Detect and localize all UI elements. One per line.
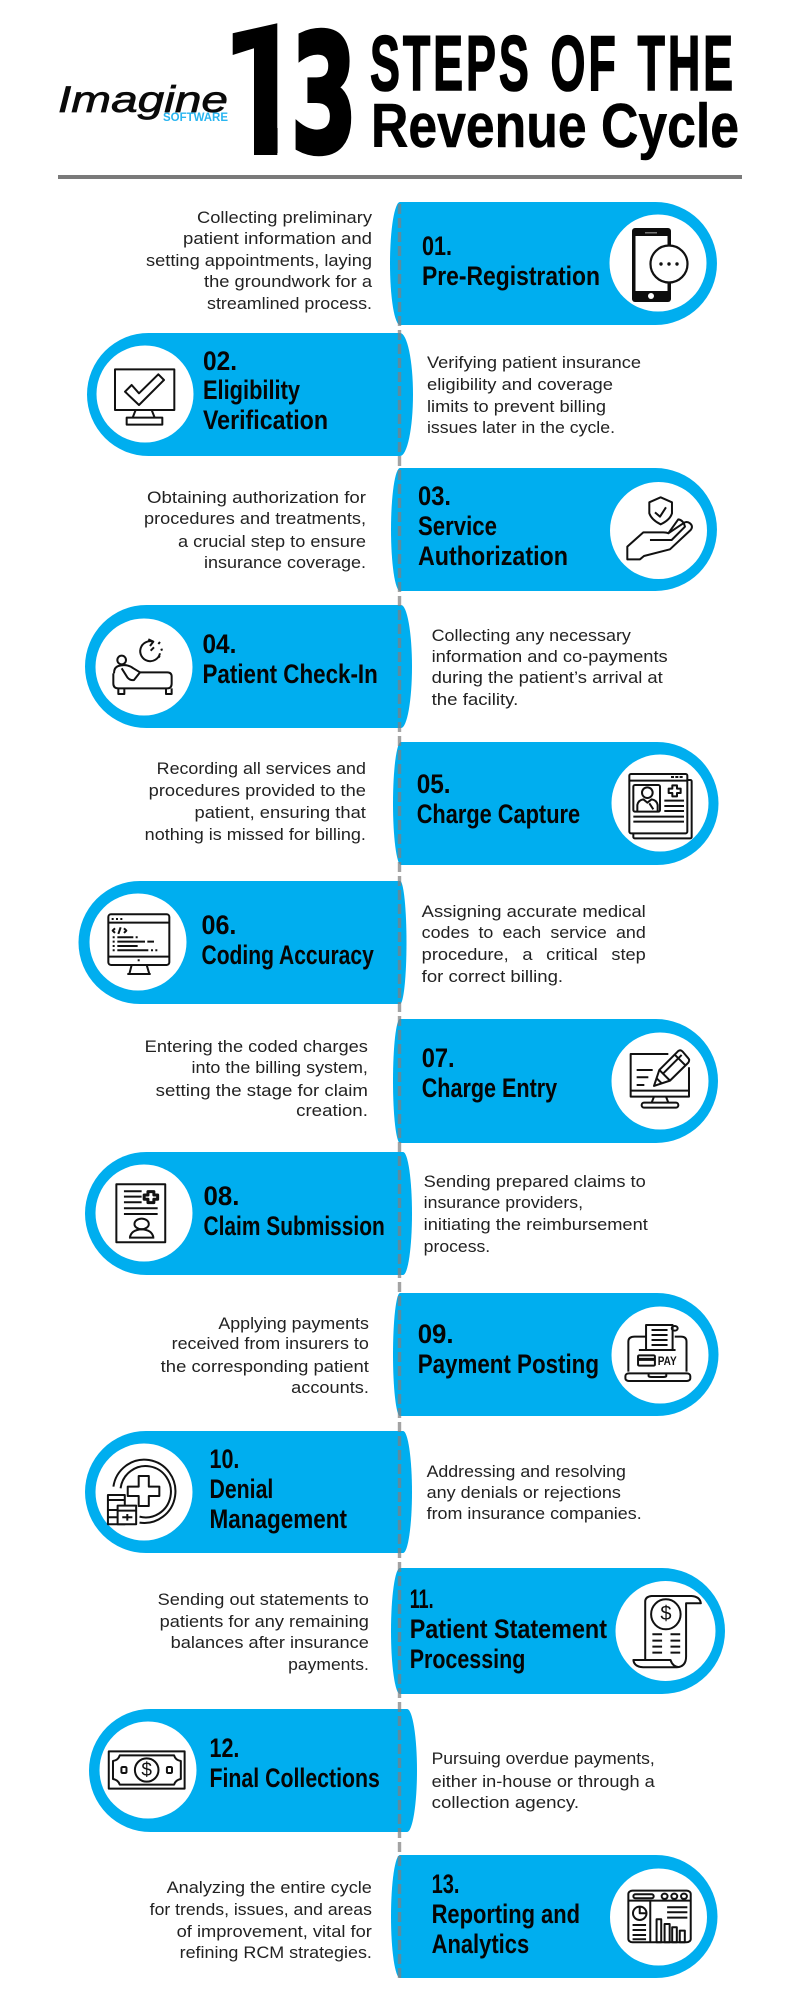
text block: step 06 description: Assigning accurate medical [422, 902, 646, 921]
panel: step 05 charge capture: 05. [417, 769, 451, 799]
text block: step 04 description: during the patient’s arrival at [432, 668, 663, 687]
text block: step 01 description [146, 208, 373, 313]
panel: step 03 service authorization [391, 468, 717, 591]
icon: receipt scroll with dollar: $ [660, 1603, 671, 1625]
text block: step 08 description [424, 1172, 648, 1256]
text block: step 07 description: creation. [296, 1101, 368, 1120]
panel: step 02 eligibility verification: 02. [203, 346, 237, 376]
panel: step 07 charge entry: Charge Entry [422, 1073, 557, 1103]
text block: step 01 description: the groundwork for a [204, 272, 373, 291]
panel: step 04 patient check-in [85, 605, 412, 728]
panel: step 10 denial management: 10. [210, 1444, 239, 1474]
text block: step 09 description: Applying payments [218, 1314, 369, 1333]
panel: step 03 service authorization: Authorization [418, 541, 568, 571]
text block: step 06 description: for correct billing. [422, 967, 563, 986]
text block: step 11 description: Sending out statements to [158, 1590, 369, 1609]
panel: step 09 payment posting: Payment Posting [418, 1349, 599, 1379]
text block: step 02 description: issues later in the cycle. [427, 418, 615, 437]
text block: step 11 description: patients for any remaining [160, 1612, 369, 1631]
panel: step 05 charge capture: Charge Capture [417, 799, 580, 829]
text block: step 08 description: initiating the reimbursement [424, 1215, 648, 1234]
panel: step 08 claim submission [85, 1152, 412, 1275]
panel: step 10 denial management: Management [210, 1504, 347, 1534]
text block: step 05 description: nothing is missed for billing. [145, 825, 366, 844]
text block: step 04 description [432, 626, 668, 709]
text block: step 09 description: received from insurers to [172, 1334, 369, 1353]
panel: step 11 patient statement processing: Patient Statement [410, 1614, 607, 1644]
panel: step 01 pre-registration: 01. [422, 231, 452, 261]
text block: step 12 description: Pursuing overdue payments, [432, 1749, 655, 1768]
panel: step 02 eligibility verification [87, 333, 413, 456]
text block: step 11 description [158, 1590, 369, 1674]
panel: step 04 patient check-in: 04. [202, 629, 236, 659]
panel: step 08 claim submission: 08. [204, 1181, 239, 1211]
panel: step 02 eligibility verification: Verification [203, 405, 328, 435]
panel: step 03 service authorization: Service [418, 511, 497, 541]
icon: dollar bill [109, 1751, 185, 1789]
text block: step 01 description: streamlined process. [207, 294, 372, 313]
logo: Imagine Software: Imagine [58, 79, 228, 120]
text block: step 10 description [427, 1462, 642, 1523]
text block: step 09 description: the corresponding patient [161, 1357, 369, 1376]
icon: patient on bed with clock [113, 639, 172, 694]
logo: Imagine Software: SOFTWARE [163, 112, 228, 124]
text block: step 05 description: Recording all services and [157, 759, 366, 778]
icon: dollar bill: $ [141, 1760, 152, 1781]
panel: step 13 reporting and analytics: Reporting and [432, 1899, 580, 1929]
text block: step 07 description [145, 1037, 368, 1120]
panel: step 02 eligibility verification: Eligibility [203, 375, 300, 405]
text block: step 10 description: any denials or rejections [427, 1483, 621, 1502]
text block: step 13 description [150, 1878, 372, 1962]
text block: step 13 description: of improvement, vital for [177, 1922, 372, 1941]
text block: step 13 description: refining RCM strategies. [180, 1943, 372, 1962]
text block: step 01 description: Collecting preliminary [197, 208, 373, 227]
panel: step 06 coding accuracy [78, 881, 406, 1004]
panel: step 11 patient statement processing: Processing [410, 1644, 525, 1674]
text block: step 02 description: Verifying patient insurance [427, 353, 641, 372]
panel: step 10 denial management [85, 1431, 412, 1553]
panel: step 07 charge entry [393, 1019, 718, 1143]
icon: laptop with pay receipt: PAY [658, 1354, 677, 1368]
title: steps of the revenue cycle [370, 19, 739, 161]
panel: step 09 payment posting: 09. [418, 1319, 454, 1349]
text block: step 06 description: procedure, a critical step [422, 945, 646, 964]
text block: step 03 description [144, 488, 366, 572]
timeline: dashed vertical connector [398, 204, 401, 1980]
text block: step 11 description: balances after insurance [171, 1633, 369, 1652]
panel: step 01 pre-registration: Pre-Registration [422, 261, 600, 291]
icon: claim form document [116, 1184, 165, 1242]
text block: step 02 description [427, 353, 641, 437]
icon: hand holding shield [627, 497, 692, 559]
text block: step 04 description: the facility. [432, 690, 518, 709]
panel: step 03 service authorization: 03. [418, 481, 451, 511]
panel: step 13 reporting and analytics [391, 1855, 717, 1978]
text block: step 08 description: process. [424, 1237, 490, 1256]
text block: step 05 description: patient, ensuring that [194, 803, 366, 822]
panel: step 06 coding accuracy: Coding Accuracy [202, 940, 374, 970]
text block: step 03 description: procedures and treatments, [144, 509, 366, 528]
text block: step 01 description: patient information and [183, 229, 372, 248]
panel: step 10 denial management: Denial [210, 1474, 273, 1504]
title: large numeral 13: 1 [250, 2, 280, 190]
text block: step 01 description: setting appointments, laying [146, 251, 372, 270]
panel: step 07 charge entry: 07. [422, 1043, 455, 1073]
text block: step 07 description: Entering the coded charges [145, 1037, 368, 1056]
text block: step 07 description: into the billing system, [192, 1058, 368, 1077]
icon: code on monitor [108, 914, 169, 974]
panel: step 13 reporting and analytics: Analytics [432, 1929, 529, 1959]
text block: step 11 description: payments. [288, 1655, 369, 1674]
panel: step 05 charge capture [393, 742, 718, 865]
header divider bar [58, 175, 742, 179]
text block: step 07 description: setting the stage for claim [156, 1081, 368, 1100]
icon: receipt scroll with dollar [633, 1596, 701, 1667]
text block: step 03 description: Obtaining authorization for [147, 488, 366, 507]
icon: monitor with pencil [631, 1050, 689, 1108]
text block: step 03 description: a crucial step to ensure [178, 532, 366, 551]
panel: step 11 patient statement processing: 11. [410, 1584, 434, 1614]
title: large numeral 13: 3 [291, 2, 357, 190]
text block: step 02 description: limits to prevent billing [427, 397, 606, 416]
panel: step 04 patient check-in: Patient Check-In [202, 659, 378, 689]
icon: laptop with pay receipt [625, 1325, 690, 1381]
text block: step 05 description [145, 759, 366, 844]
text block: step 10 description: from insurance companies. [427, 1504, 642, 1523]
text block: step 09 description: accounts. [291, 1378, 369, 1397]
panel: step 09 payment posting [393, 1293, 718, 1416]
title: steps of the revenue cycle: Revenue Cycle [371, 92, 739, 161]
text block: step 10 description: Addressing and resolving [427, 1462, 626, 1481]
text block: step 08 description: insurance providers, [424, 1193, 583, 1212]
icon: medical cross with boxes [108, 1460, 175, 1524]
text block: step 04 description: information and co-payments [432, 647, 668, 666]
text block: step 13 description: Analyzing the entire cycle [167, 1878, 372, 1897]
text block: step 05 description: procedures provided to the [149, 781, 366, 800]
text block: step 04 description: Collecting any necessary [432, 626, 631, 645]
icon: monitor with check mark [115, 369, 174, 425]
text block: step 06 description: codes to each service and [422, 923, 646, 942]
text block: step 02 description: eligibility and coverage [427, 375, 613, 394]
panel: step 13 reporting and analytics: 13. [432, 1869, 460, 1899]
text block: step 03 description: insurance coverage. [204, 553, 366, 572]
text block: step 12 description: collection agency. [432, 1793, 579, 1812]
text block: step 09 description [161, 1314, 369, 1397]
text block: step 12 description [432, 1749, 655, 1812]
icon: smartphone with chat bubble [632, 228, 688, 302]
panel: step 12 final collections: Final Collections [210, 1763, 380, 1793]
panel: step 08 claim submission: Claim Submission [204, 1211, 385, 1241]
panel: step 12 final collections [89, 1709, 417, 1832]
icon: medical record window [629, 774, 692, 838]
text block: step 13 description: for trends, issues, and areas [150, 1900, 372, 1919]
panel: step 01 pre-registration [390, 202, 717, 325]
text block: step 08 description: Sending prepared claims to [424, 1172, 646, 1191]
text block: step 12 description: either in-house or through a [432, 1772, 655, 1791]
panel: step 06 coding accuracy: 06. [202, 910, 236, 940]
text block: step 06 description [422, 902, 646, 986]
icon: analytics dashboard window [628, 1891, 691, 1942]
panel: step 11 patient statement processing [391, 1568, 725, 1694]
panel: step 12 final collections: 12. [210, 1733, 239, 1763]
